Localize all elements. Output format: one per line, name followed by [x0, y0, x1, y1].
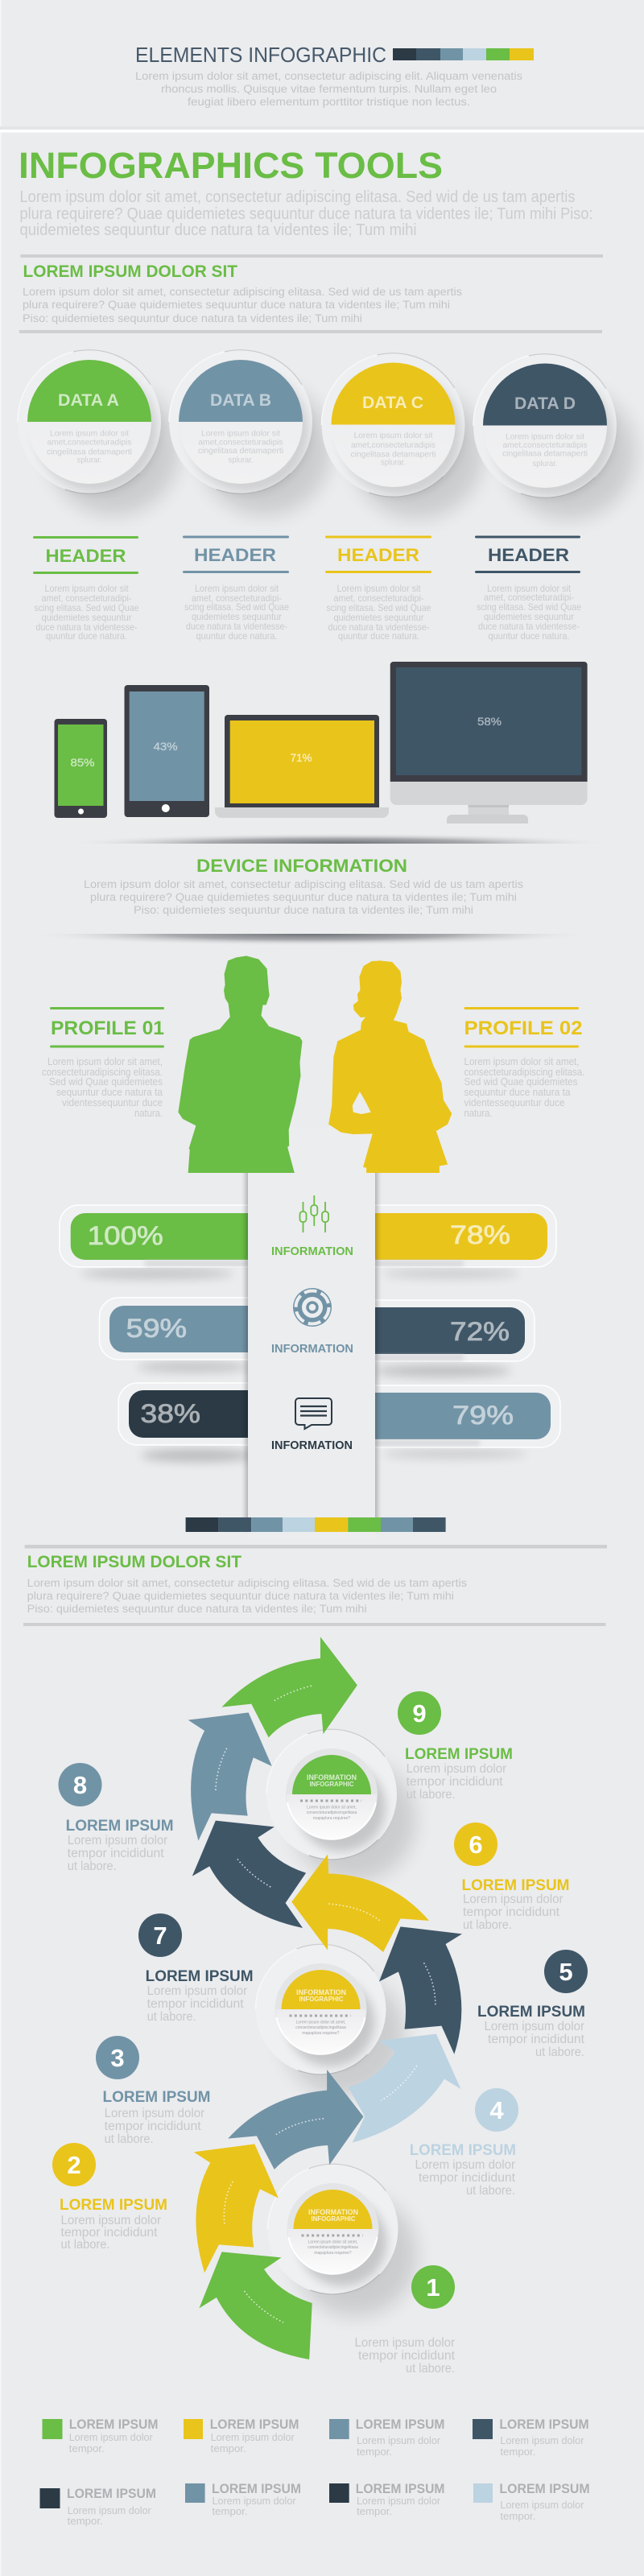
device information block [84, 856, 523, 916]
section three heading [23, 1545, 607, 1626]
profile 01 text: consecteturadipiscing elitasa. [42, 1067, 163, 1078]
section one heading: LOREM IPSUM DOLOR SIT [23, 262, 237, 281]
data circle B [169, 350, 331, 515]
step 7: ut labore. [147, 2010, 196, 2024]
legend item green: Lorem ipsum dolor [69, 2431, 153, 2443]
label: information green: INFORMATION [271, 1245, 353, 1258]
medallion bottom (yellow) [267, 2164, 417, 2316]
medallion middle (yellow): consecteturadipiscingelitasa [295, 2025, 346, 2030]
header column A: amet, consecteturadipi- [42, 592, 132, 604]
medallion middle (yellow): mapaplura requiree? [302, 2031, 340, 2036]
profile 01 text: sequuntur duce natura ta [56, 1087, 163, 1098]
header column D [475, 536, 581, 642]
arrow 9 green [222, 1637, 357, 1737]
bar 78%: 78% [450, 1220, 510, 1249]
section three heading: LOREM IPSUM DOLOR SIT [27, 1553, 242, 1571]
section three heading: Lorem ipsum dolor sit amet, consectetur adipiscing elitasa. Sed wid de us tam apertis [27, 1577, 467, 1589]
step 1: ut labore. [406, 2362, 455, 2376]
step 3: tempor incididunt [105, 2120, 201, 2133]
bar 38%: 38% [140, 1399, 200, 1428]
legend item green: tempor. [69, 2442, 105, 2454]
data circle C: Lorem ipsum dolor sit [354, 431, 433, 440]
profile 02 text: Lorem ipsum dolor sit amet, [464, 1056, 580, 1067]
arrow 4 light blue [349, 2034, 460, 2143]
header column A: Lorem ipsum dolor sit [45, 583, 129, 594]
intro paragraph: quidemietes sequuntur duce natura ta videntes ile; Tum mihi [19, 221, 417, 239]
header column A: quidemietes sequuntur [42, 612, 132, 623]
legend item blue two: tempor. [213, 2505, 248, 2517]
step 9: LOREM IPSUM [405, 1745, 513, 1763]
device: laptop 71%: 71% [290, 751, 312, 764]
legend item green: LOREM IPSUM [69, 2417, 158, 2432]
legend item blue two: Lorem ipsum dolor [213, 2495, 296, 2507]
header column C: Lorem ipsum dolor sit [336, 583, 421, 594]
header column A: quuntur duce natura. [46, 630, 127, 642]
legend item dark one: LOREM IPSUM [67, 2486, 156, 2501]
step 7: LOREM IPSUM [146, 1967, 254, 1985]
step 7: tempor incididunt [147, 1997, 244, 2011]
header column A: duce natura ta videntesse- [35, 621, 138, 633]
medallion bottom (yellow): Lorem ipsum dolor sit amet, [308, 2240, 357, 2244]
medallion top (green) [266, 1729, 415, 1881]
data circle D [473, 354, 635, 519]
header column C: HEADER [337, 545, 419, 565]
percentage bars right [354, 1205, 560, 1459]
profile 02 text: videntessequuntur duce [464, 1097, 565, 1108]
data circle C: splurar. [381, 457, 406, 467]
profile 01 text [42, 1007, 164, 1119]
data circle D: amet,consecteturadipis [502, 440, 588, 450]
medallion middle (yellow): INFORMATION [296, 1988, 346, 1997]
header block [135, 44, 534, 108]
legend item blue: Lorem ipsum dolor [357, 2434, 441, 2446]
legend item blue: tempor. [357, 2446, 392, 2458]
header column C: quidemietes sequuntur [333, 612, 423, 623]
percentage bars left [60, 1205, 279, 1462]
step 2: Lorem ipsum dolor [61, 2214, 161, 2227]
bar 78% [354, 1205, 556, 1278]
device: tablet 43% [124, 685, 209, 817]
section one heading: plura requirere? Quae quidemietes sequuntur duce natura ta videntes ile; Tum mihi [23, 299, 450, 311]
profile 01 text: Lorem ipsum dolor sit amet, [47, 1056, 163, 1067]
section three heading: plura requirere? Quae quidemietes sequuntur duce natura ta videntes ile; Tum mihi [27, 1590, 454, 1602]
data circle B: DATA B [210, 391, 271, 410]
profile 02 text: consecteturadipiscing elitasa. [464, 1067, 584, 1078]
data circle A: splurar. [77, 456, 101, 465]
data circle A: Lorem ipsum dolor sit [50, 428, 129, 438]
legend item dark two: LOREM IPSUM [356, 2481, 444, 2496]
header column B: scing elitasa. Sed wid Quae [184, 601, 289, 613]
legend item dark two: tempor. [357, 2505, 392, 2517]
intro paragraph: plura requirere? Quae quidemietes sequuntur duce natura ta videntes ile; Tum mihi Piso: [19, 205, 592, 223]
medallion middle (yellow) [256, 1944, 404, 2096]
step 4: LOREM IPSUM [410, 2141, 516, 2159]
step 9: tempor incididunt [407, 1775, 503, 1789]
arrow 2 yellow [194, 2144, 279, 2273]
step 7 [138, 1913, 254, 2024]
bar 100% [60, 1205, 277, 1279]
step 2 [52, 2143, 167, 2252]
data circle A: amet,consecteturadipis [47, 438, 132, 448]
header column B: quidemietes sequuntur [192, 611, 282, 622]
header description: feugiat libero elementum porttitor tristique non lectus. [188, 96, 470, 108]
device floor shadow [113, 836, 568, 844]
data circle D: DATA D [514, 394, 576, 413]
step 2: ut labore. [61, 2238, 109, 2252]
step 6: ut labore. [463, 1918, 512, 1932]
device information block: plura requirere? Quae quidemietes sequuntur duce natura ta videntes ile; Tum mihi [90, 891, 517, 903]
data circle D: cingelitasa detamaperti [502, 449, 588, 459]
legend item slate: LOREM IPSUM [499, 2417, 589, 2432]
legend item yellow [184, 2417, 299, 2454]
step 1: Lorem ipsum dolor [354, 2336, 455, 2350]
bar 59% [100, 1298, 277, 1373]
legend item blue [329, 2417, 444, 2458]
legend item blue two [185, 2481, 301, 2517]
step 3: ut labore. [105, 2132, 154, 2146]
header column B: quuntur duce natura. [196, 630, 277, 642]
bar 38% [118, 1383, 279, 1462]
legend item light [473, 2481, 590, 2522]
legend item dark one: Lorem ipsum dolor [68, 2504, 151, 2516]
section one heading: Lorem ipsum dolor sit amet, consectetur adipiscing elitasa. Sed wid de us tam apertis [23, 286, 462, 298]
profile 02 text: PROFILE 02 [464, 1018, 583, 1039]
header column B: HEADER [194, 545, 276, 565]
step 1: tempor incididunt [358, 2349, 456, 2363]
device information block: Lorem ipsum dolor sit amet, consectetur adipiscing elitasa. Sed wid de us tam apertis [84, 878, 523, 890]
bar 72% [354, 1300, 535, 1377]
legend item dark one [40, 2486, 156, 2527]
step 8: tempor incididunt [68, 1847, 164, 1860]
silhouette: man [178, 956, 303, 1173]
label: information blue: INFORMATION [271, 1342, 353, 1356]
legend item light: LOREM IPSUM [499, 2481, 590, 2496]
arrow 5 dark [379, 1926, 462, 2054]
bar 79%: 79% [452, 1401, 514, 1430]
legend item yellow: LOREM IPSUM [210, 2417, 299, 2432]
step 5: Lorem ipsum dolor [485, 2020, 584, 2033]
data circle B: Lorem ipsum dolor sit [201, 428, 280, 438]
profile 02 text: Sed wid Quae quidemietes [464, 1076, 578, 1088]
arrow 6 yellow [291, 1854, 429, 1952]
header column A: HEADER [45, 546, 126, 566]
header column B: Lorem ipsum dolor sit [195, 583, 279, 594]
header column D: amet, consecteturadipi- [484, 592, 574, 603]
profile 01 text: videntessequuntur duce [62, 1097, 163, 1108]
step 5 [477, 1950, 588, 2059]
step 6: LOREM IPSUM [462, 1876, 570, 1894]
legend item dark one: tempor. [68, 2515, 103, 2527]
step 9: ut labore. [407, 1788, 456, 1802]
step 1 [354, 2265, 456, 2376]
step 9: 9 [412, 1699, 427, 1728]
device: desktop monitor 58%: 58% [477, 715, 502, 728]
header column D: quidemietes sequuntur [484, 611, 574, 622]
data circle B: splurar. [229, 456, 253, 465]
main title: INFOGRAPHICS TOOLS [19, 145, 443, 186]
section one heading: Piso: quidemietes sequuntur duce natura ta videntes ile; Tum mihi [23, 312, 362, 324]
silhouette: woman [328, 960, 452, 1173]
intro paragraph: Lorem ipsum dolor sit amet, consectetur adipiscing elitasa. Sed wid de us tam apertis [19, 188, 575, 206]
header color strip [393, 48, 534, 60]
header description: Lorem ipsum dolor sit amet, consectetur adipiscing elit. Aliquam venenatis [135, 70, 522, 82]
device: tablet 43%: 43% [154, 740, 178, 753]
legend item slate: tempor. [500, 2446, 535, 2458]
section one heading [19, 254, 603, 333]
arrow 7 dark [192, 1821, 306, 1928]
header column C: amet, consecteturadipi- [333, 592, 423, 604]
bar 100%: 100% [88, 1221, 163, 1250]
data circle D: splurar. [533, 459, 557, 469]
header column B: duce natura ta videntesse- [186, 621, 287, 632]
step 4: 4 [489, 2096, 504, 2124]
header title: ELEMENTS INFOGRAPHIC [135, 44, 386, 67]
header description [135, 70, 522, 108]
header column C: scing elitasa. Sed wid Quae [327, 602, 431, 613]
step 2: tempor incididunt [61, 2226, 158, 2240]
header column B: amet, consecteturadipi- [192, 592, 282, 604]
icon: sliders [299, 1195, 328, 1232]
header column C: quuntur duce natura. [338, 630, 419, 642]
profile 01 text: natura. [134, 1108, 163, 1119]
data circle A: DATA A [58, 391, 119, 410]
step 6: tempor incididunt [463, 1905, 560, 1919]
header column C [325, 536, 431, 642]
profile 02 text: sequuntur duce natura ta [464, 1087, 571, 1098]
arrow 8 blue [188, 1712, 272, 1841]
medallion bottom (yellow): INFORMATION [308, 2208, 358, 2217]
device: laptop 71% [215, 715, 389, 818]
legend item yellow: tempor. [211, 2442, 246, 2454]
medallion top (green): INFOGRAPHIC [309, 1780, 354, 1788]
legend item green [42, 2417, 158, 2454]
header column D: Lorem ipsum dolor sit [487, 583, 572, 594]
medallion top (green): Lorem ipsum dolor sit amet, [307, 1805, 357, 1810]
step 8: Lorem ipsum dolor [68, 1834, 167, 1847]
header column D: HEADER [488, 545, 569, 565]
step 4: Lorem ipsum dolor [415, 2158, 515, 2172]
icon: target wheel [293, 1288, 332, 1327]
step 9: Lorem ipsum dolor [407, 1762, 506, 1776]
step 4: tempor incididunt [419, 2171, 516, 2185]
step 6 [454, 1823, 570, 1932]
header column C: duce natura ta videntesse- [328, 621, 430, 633]
data circle A [18, 350, 180, 515]
device information block: Piso: quidemietes sequuntur duce natura ta videntes ile; Tum mihi [134, 904, 473, 916]
legend item slate [473, 2417, 589, 2458]
section three heading: Piso: quidemietes sequuntur duce natura ta videntes ile; Tum mihi [27, 1603, 367, 1615]
profile 01 text: Sed wid Quae quidemietes [49, 1076, 163, 1088]
profile 02 text: natura. [464, 1108, 493, 1119]
medallion middle (yellow): Lorem ipsum dolor sit amet, [296, 2021, 345, 2025]
step 3 [96, 2036, 211, 2146]
step 2: LOREM IPSUM [60, 2196, 167, 2214]
data circle A: cingelitasa detamaperti [47, 448, 132, 457]
medallion middle (yellow): INFOGRAPHIC [299, 1995, 343, 2003]
step 1: 1 [426, 2273, 440, 2301]
data circle C: amet,consecteturadipis [351, 440, 436, 450]
header column D: duce natura ta videntesse- [478, 621, 580, 632]
device: desktop monitor 58% [390, 662, 588, 824]
step 3: Lorem ipsum dolor [105, 2107, 204, 2120]
center column panel [246, 1127, 378, 1539]
medallion top (green): INFORMATION [307, 1773, 357, 1782]
step 5: LOREM IPSUM [477, 2003, 585, 2021]
step 3: 3 [110, 2044, 125, 2072]
medallion top (green): consecteturadipiscingelitasa [307, 1810, 357, 1815]
header column A [33, 536, 139, 642]
step 6: Lorem ipsum dolor [463, 1893, 564, 1906]
step 2: 2 [67, 2151, 81, 2179]
bar 59%: 59% [126, 1314, 187, 1343]
legend item slate: Lorem ipsum dolor [500, 2434, 584, 2446]
bar 79% [354, 1385, 560, 1459]
legend item light: Lorem ipsum dolor [500, 2499, 584, 2511]
bar 72%: 72% [450, 1317, 510, 1346]
device: phone 85% [55, 719, 107, 818]
step 8: 8 [73, 1771, 87, 1799]
header column A: scing elitasa. Sed wid Quae [34, 602, 139, 613]
step 5: tempor incididunt [488, 2033, 585, 2046]
icon: speech bubble [295, 1398, 332, 1429]
step 4 [410, 2088, 518, 2198]
intro paragraph [19, 188, 592, 239]
legend item yellow: Lorem ipsum dolor [211, 2431, 295, 2443]
step 8: LOREM IPSUM [66, 1817, 174, 1835]
medallion bottom (yellow): mapaplura requiree? [314, 2251, 352, 2256]
step 9 [398, 1691, 513, 1802]
medallion bottom (yellow): consecteturadipiscingelitasa [308, 2245, 358, 2250]
section divider shadow [74, 934, 546, 943]
arrow 3 blue [228, 2070, 364, 2169]
profile 02 text [464, 1007, 584, 1119]
legend item blue two: LOREM IPSUM [212, 2481, 301, 2496]
data circle D: Lorem ipsum dolor sit [506, 431, 584, 441]
color strip lower [186, 1517, 446, 1532]
legend item light: tempor. [500, 2510, 535, 2522]
step 7: Lorem ipsum dolor [147, 1984, 247, 1998]
arrow 1 green [199, 2252, 312, 2359]
header column B [183, 536, 289, 642]
label: information dark: INFORMATION [271, 1439, 353, 1452]
data circle C: cingelitasa detamaperti [351, 449, 436, 459]
data circle B: amet,consecteturadipis [198, 438, 283, 448]
step 8: ut labore. [68, 1860, 117, 1873]
legend item dark two [329, 2481, 444, 2517]
profile 01 text: PROFILE 01 [51, 1018, 164, 1039]
step 6: 6 [469, 1831, 483, 1859]
step 7: 7 [153, 1922, 167, 1950]
medallion top (green): mapaplura requiree? [313, 1816, 350, 1821]
medallion bottom (yellow): INFOGRAPHIC [311, 2215, 356, 2223]
data circle C: DATA C [362, 394, 423, 412]
step 5: 5 [559, 1958, 573, 1986]
step 8 [58, 1763, 174, 1873]
legend item dark two: Lorem ipsum dolor [357, 2495, 441, 2507]
data circle B: cingelitasa detamaperti [198, 446, 283, 456]
step 3: LOREM IPSUM [103, 2088, 211, 2106]
data circle C [321, 353, 483, 518]
step 5: ut labore. [535, 2046, 584, 2059]
legend item blue: LOREM IPSUM [356, 2417, 444, 2432]
device: phone 85%: 85% [71, 756, 95, 769]
step 4: ut labore. [466, 2184, 515, 2198]
header column D: scing elitasa. Sed wid Quae [477, 601, 581, 613]
header description: rhoncus mollis. Quisque vitae fermentum turpis. Nullam eget leo [161, 83, 497, 95]
device information block: DEVICE INFORMATION [196, 856, 407, 876]
header column D: quuntur duce natura. [488, 630, 570, 642]
